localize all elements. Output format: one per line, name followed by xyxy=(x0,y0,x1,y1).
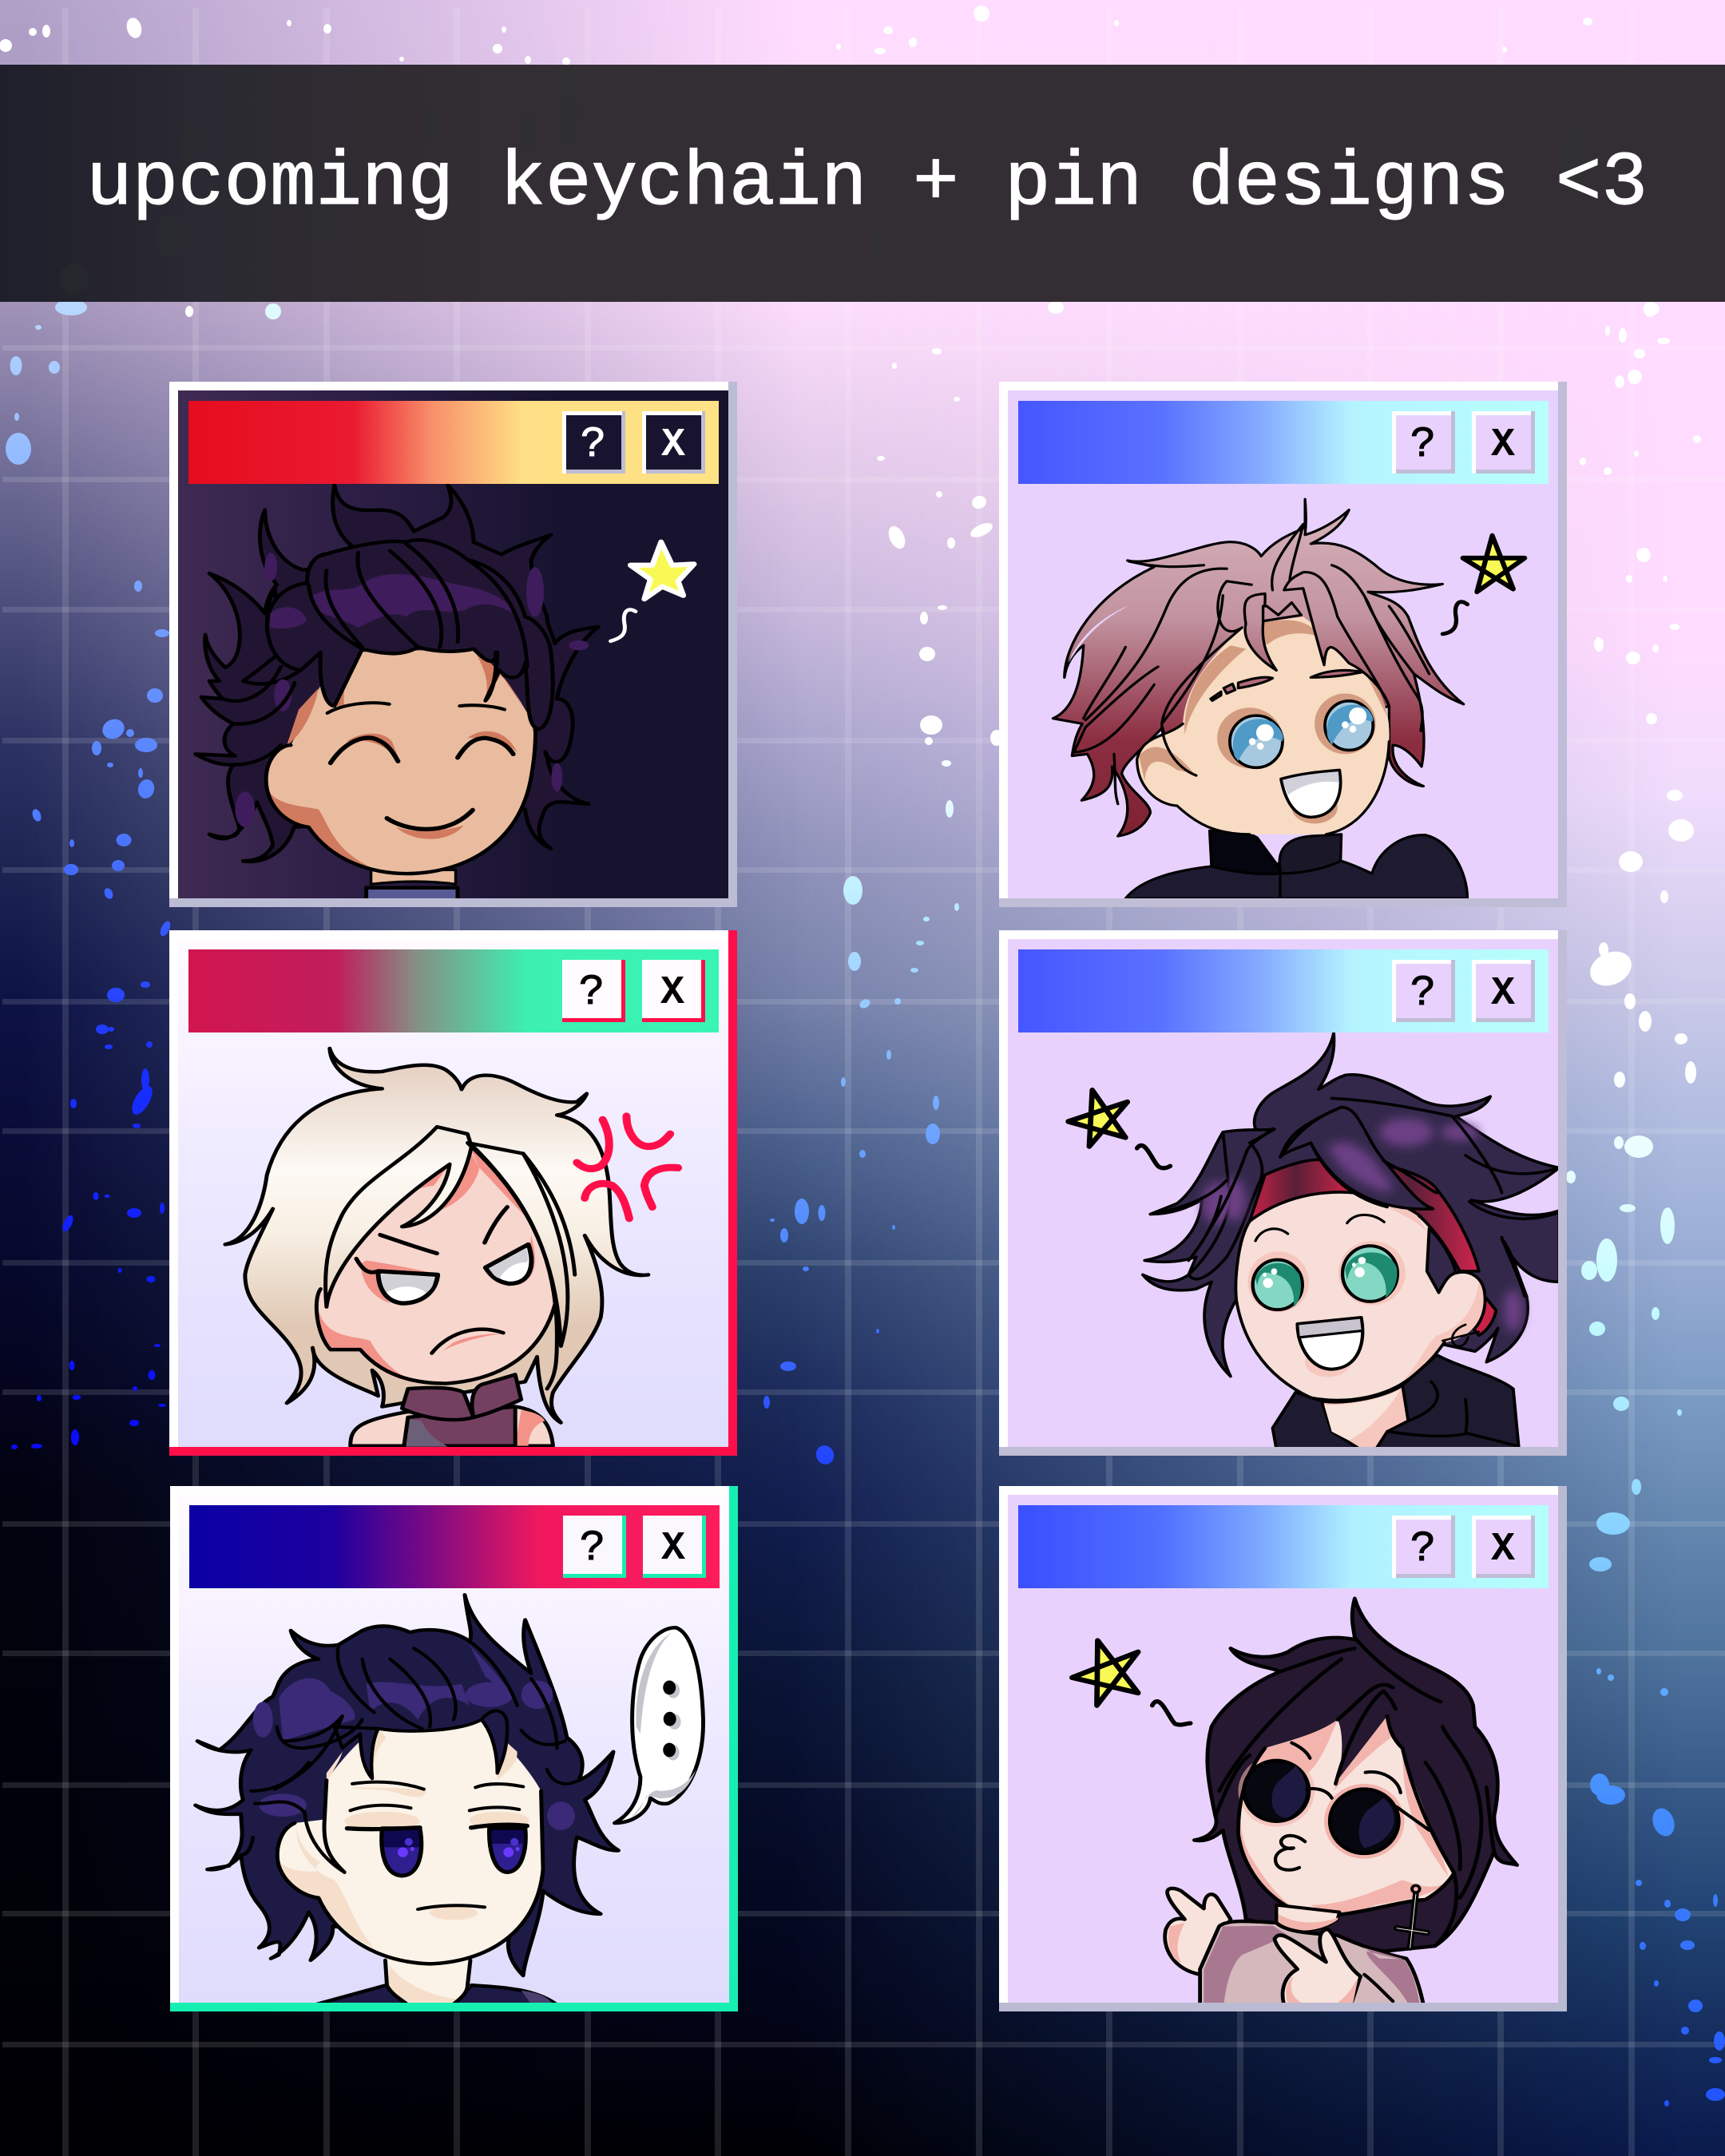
title bar xyxy=(1018,1505,1549,1588)
header band xyxy=(0,65,1725,302)
petals: top strip xyxy=(0,6,1656,319)
button: close: X xyxy=(661,1526,685,1571)
window frame xyxy=(169,930,737,1456)
button: help: ? xyxy=(581,421,606,470)
panel: window 1, dark xyxy=(169,382,737,907)
panel: window 4, lilac xyxy=(999,930,1567,1456)
button: help: ? xyxy=(1410,969,1436,1018)
window frame xyxy=(170,1486,738,2011)
window frame xyxy=(999,1486,1567,2011)
button: close: X xyxy=(661,422,685,468)
button: close xyxy=(1472,960,1535,1022)
button: close: X xyxy=(660,970,684,1016)
button: help: ? xyxy=(580,1524,605,1573)
window frame xyxy=(169,382,737,907)
window frame xyxy=(999,382,1567,907)
character: pink-red hair with blue eyes xyxy=(1053,499,1525,898)
button: close xyxy=(1472,411,1535,474)
title bar xyxy=(1018,401,1549,484)
button: help: ? xyxy=(579,969,605,1017)
character: indigo hair, deadpan xyxy=(196,1595,704,2005)
panel: window 3, angry xyxy=(169,930,737,1456)
button: help xyxy=(1392,960,1455,1022)
petals: centre xyxy=(763,348,1003,1468)
title bar xyxy=(1018,949,1549,1032)
panel: window 5, speech bubble xyxy=(170,1486,738,2011)
title: upcoming keychain + pin designs <3 xyxy=(86,140,1648,227)
button: help: ? xyxy=(1410,421,1436,470)
panel: window 6, lilac xyxy=(999,1486,1567,2011)
button: close: X xyxy=(1491,1527,1515,1572)
button: help xyxy=(1392,411,1455,474)
character: purple hair with red headband xyxy=(1069,1033,1559,1449)
button: help xyxy=(562,411,625,474)
button: close xyxy=(642,960,705,1022)
panel: window 2, lilac xyxy=(999,382,1567,907)
button: help xyxy=(563,1516,626,1578)
speech bubble xyxy=(615,1627,704,1823)
character: dark hair with round sunglasses xyxy=(1072,1599,1517,2005)
button: close xyxy=(643,1516,706,1578)
character: blonde angry xyxy=(225,1048,678,1447)
title bar xyxy=(188,949,719,1032)
title bar xyxy=(189,1505,720,1588)
petals: right side xyxy=(1566,303,1725,2106)
button: close: X xyxy=(1491,971,1515,1017)
button: help xyxy=(562,960,625,1022)
petals: left side xyxy=(6,299,172,1449)
button: close xyxy=(642,411,705,474)
button: help xyxy=(1392,1516,1455,1578)
title bar xyxy=(188,401,719,484)
button: close xyxy=(1472,1516,1535,1578)
character: smiling curly purple hair xyxy=(196,485,694,902)
button: close: X xyxy=(1491,422,1515,468)
window frame xyxy=(999,930,1567,1456)
button: help: ? xyxy=(1410,1525,1436,1574)
